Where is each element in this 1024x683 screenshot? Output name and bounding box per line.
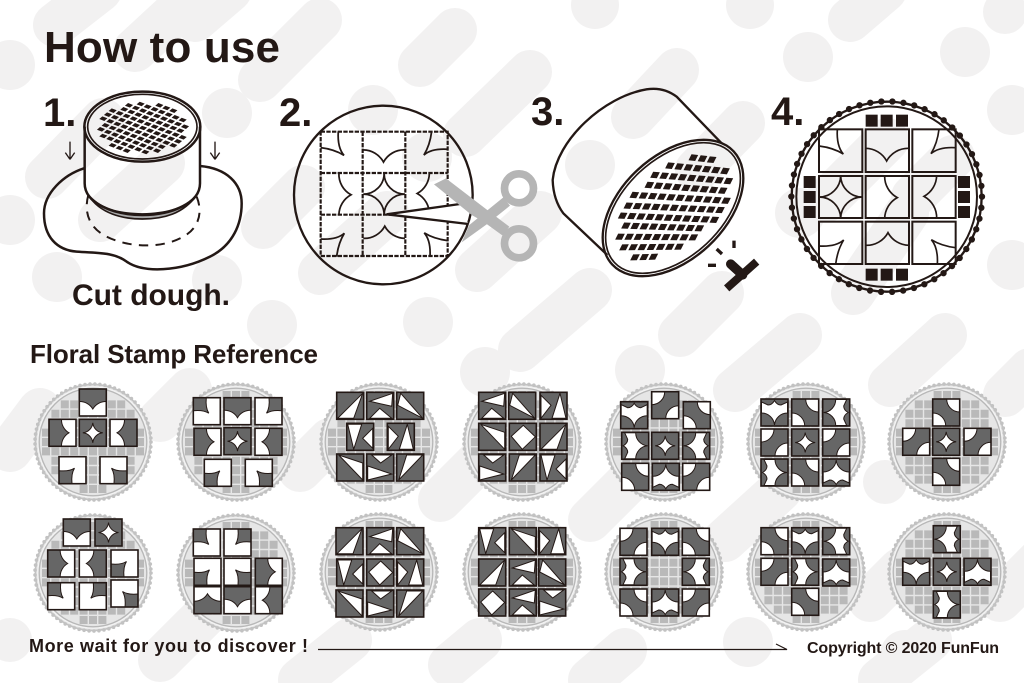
- floral stamp 5: [606, 384, 722, 500]
- title: How to use: [44, 23, 280, 72]
- footer text: more wait: More wait for you to discover !: [29, 636, 308, 656]
- step number 2: 2.: [279, 91, 312, 135]
- heading: floral stamp reference: Floral Stamp Reference: [30, 339, 318, 369]
- floral stamp 10: [321, 514, 437, 630]
- dough circle with tile grid: [294, 106, 473, 284]
- step 2: cut tiles with scissors: [279, 91, 533, 284]
- floral stamp 2: [178, 384, 294, 500]
- floral stamp 14: [889, 514, 1005, 630]
- caption: cut dough: Cut dough.: [72, 279, 230, 312]
- step number 3: 3.: [531, 90, 564, 134]
- floral stamp 1: [35, 384, 151, 500]
- icon: cutter grid: [82, 94, 204, 162]
- copyright: Copyright © 2020 FunFun: [807, 640, 999, 657]
- arrow: [318, 644, 787, 650]
- floral stamp 11: [464, 514, 580, 630]
- floral stamp 9: [178, 515, 294, 631]
- floral stamp 4: [464, 384, 580, 500]
- scissors: [434, 174, 533, 258]
- step number 1: 1.: [43, 91, 76, 135]
- icon: press handle: [708, 241, 757, 288]
- stamp illustration: [553, 89, 769, 303]
- floral stamp 3: [321, 384, 437, 500]
- step number 4: 4.: [771, 90, 804, 134]
- floral stamp 7: [889, 384, 1005, 500]
- floral stamp 12: [606, 514, 722, 630]
- pie with stamped tiles: [791, 101, 982, 292]
- cutter and dough illustration: [44, 92, 242, 269]
- floral stamp 8: [35, 515, 151, 631]
- step 3: press stamp: [531, 89, 769, 303]
- step 1: cut dough: [43, 91, 242, 312]
- step 4: finished pie: [771, 90, 982, 292]
- floral stamp 13: [748, 514, 864, 630]
- icon: stamp face grid: [617, 157, 732, 257]
- floral stamp 6: [748, 384, 864, 500]
